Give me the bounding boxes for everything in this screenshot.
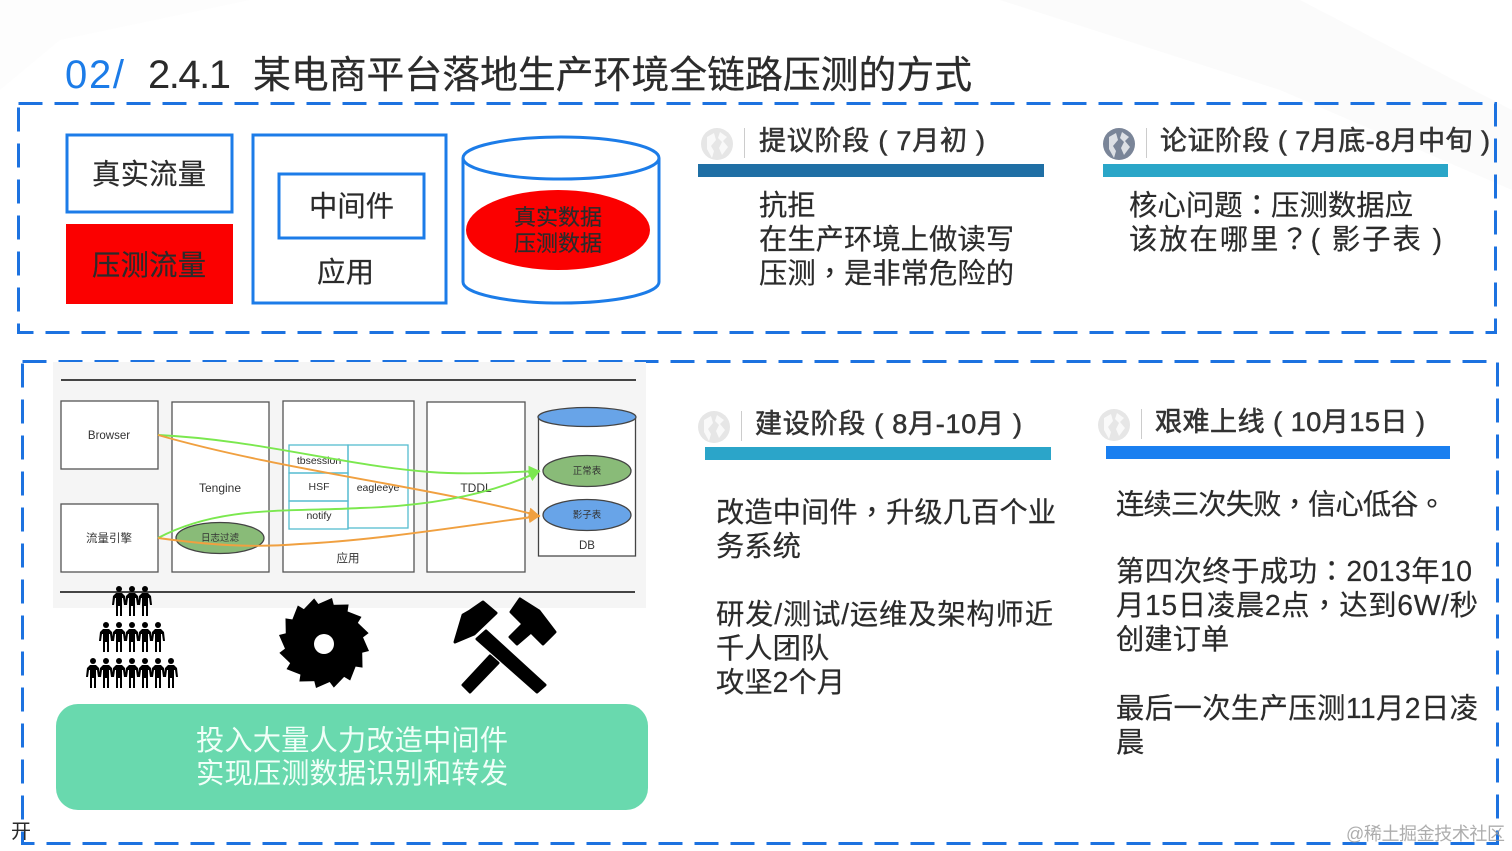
- icon: globe: [701, 128, 733, 160]
- section: launch stage: 晨: [1116, 726, 1144, 758]
- section: proposal stage: 抗拒: [759, 189, 816, 221]
- application box: tbsession: [297, 455, 341, 467]
- browser box: Browser: [88, 430, 130, 442]
- DB cylinder: DB: [579, 540, 595, 552]
- section: launch stage: 月15日凌晨2点，达到6W/秒: [1116, 583, 1478, 624]
- icon: people pyramid: [86, 586, 178, 688]
- application box: 应用: [336, 551, 360, 565]
- tengine box: Tengine: [199, 481, 241, 495]
- database cylinder: 压测数据: [514, 231, 602, 256]
- icon: globe: [1098, 409, 1130, 441]
- DB cylinder: [538, 408, 636, 556]
- panel: middleware and application: [253, 135, 446, 303]
- architecture diagram: [53, 362, 646, 608]
- section: launch stage: 连续三次失败，信心低谷。: [1116, 482, 1446, 523]
- browser box: [61, 401, 158, 469]
- section: proposal stage: [698, 126, 1044, 292]
- callout: green summary: 投入大量人力改造中间件: [196, 724, 508, 756]
- section: construction stage: [698, 409, 1056, 698]
- real traffic box: 真实流量: [92, 158, 206, 190]
- icon: saw blade: [279, 598, 369, 688]
- section: construction stage: 建设阶段 ( 8月-10月 ): [755, 409, 1022, 439]
- section: validation stage: [1103, 126, 1490, 258]
- panel: middleware and application: 应用: [317, 256, 374, 288]
- section: construction stage: 研发/测试/运维及架构师近: [716, 598, 1053, 630]
- section: validation stage: 该放在哪里？( 影子表 ): [1129, 217, 1442, 258]
- title: 02/: [65, 53, 125, 97]
- normal table: 正常表: [573, 465, 602, 477]
- arrows: traffic flow: [158, 435, 540, 546]
- panel: traffic boxes: [66, 135, 233, 304]
- section: launch stage: 创建订单: [1116, 623, 1229, 655]
- application box: [283, 401, 414, 572]
- application box: HSF: [308, 481, 330, 493]
- normal table: [543, 456, 631, 486]
- log filter: [176, 522, 264, 554]
- icon: globe: [698, 411, 730, 443]
- log filter: 日志过滤: [201, 532, 239, 544]
- TDDL box: TDDL: [460, 481, 492, 495]
- application box: notify: [306, 510, 332, 522]
- callout: green summary: 实现压测数据识别和转发: [196, 757, 508, 789]
- database cylinder: 真实数据: [514, 205, 602, 230]
- section: construction stage: 攻坚2个月: [716, 666, 845, 698]
- load test traffic box: 压测流量: [92, 249, 206, 281]
- section: launch stage: [1098, 407, 1478, 758]
- shadow table: 影子表: [573, 509, 602, 521]
- tengine box: [172, 402, 269, 572]
- callout: green summary: [56, 704, 648, 810]
- section: launch stage: 最后一次生产压测11月2日凌: [1116, 692, 1478, 724]
- icon: globe: [1103, 128, 1135, 160]
- traffic engine box: [61, 504, 158, 572]
- section: construction stage: 改造中间件，升级几百个业: [716, 490, 1056, 531]
- section: proposal stage: 压测，是非常危险的: [759, 251, 1014, 292]
- section: construction stage: 千人团队: [716, 632, 829, 664]
- section: proposal stage: 在生产环境上做读写: [759, 223, 1014, 255]
- TDDL box: [427, 402, 525, 572]
- section: validation stage: 核心问题：压测数据应: [1129, 183, 1413, 224]
- panel: bottom dashed frame: [22, 362, 1498, 844]
- load test traffic box: [66, 224, 233, 304]
- traffic engine box: 流量引擎: [86, 531, 132, 545]
- section: validation stage: 论证阶段 ( 7月底-8月中旬 ): [1160, 126, 1490, 156]
- watermark: @稀土掘金技术社区: [1346, 824, 1505, 844]
- real traffic box: [67, 135, 232, 212]
- title: 2.4.1: [148, 53, 231, 97]
- section: launch stage: 艰难上线 ( 10月15日 ): [1155, 407, 1425, 437]
- title: 某电商平台落地生产环境全链路压测的方式: [253, 55, 972, 97]
- section: construction stage: 务系统: [716, 530, 801, 562]
- clipped footer character: 开: [11, 821, 31, 843]
- database cylinder: [463, 137, 659, 303]
- shadow table: [543, 500, 631, 530]
- panel: middleware and application: 中间件: [309, 190, 394, 222]
- icon: crossed hammers: [455, 599, 555, 692]
- application box: eagleeye: [357, 482, 399, 494]
- panel: top dashed frame: [18, 104, 1496, 332]
- section: launch stage: 第四次终于成功：2013年10: [1116, 549, 1472, 590]
- section: proposal stage: 提议阶段 ( 7月初 ): [759, 126, 985, 156]
